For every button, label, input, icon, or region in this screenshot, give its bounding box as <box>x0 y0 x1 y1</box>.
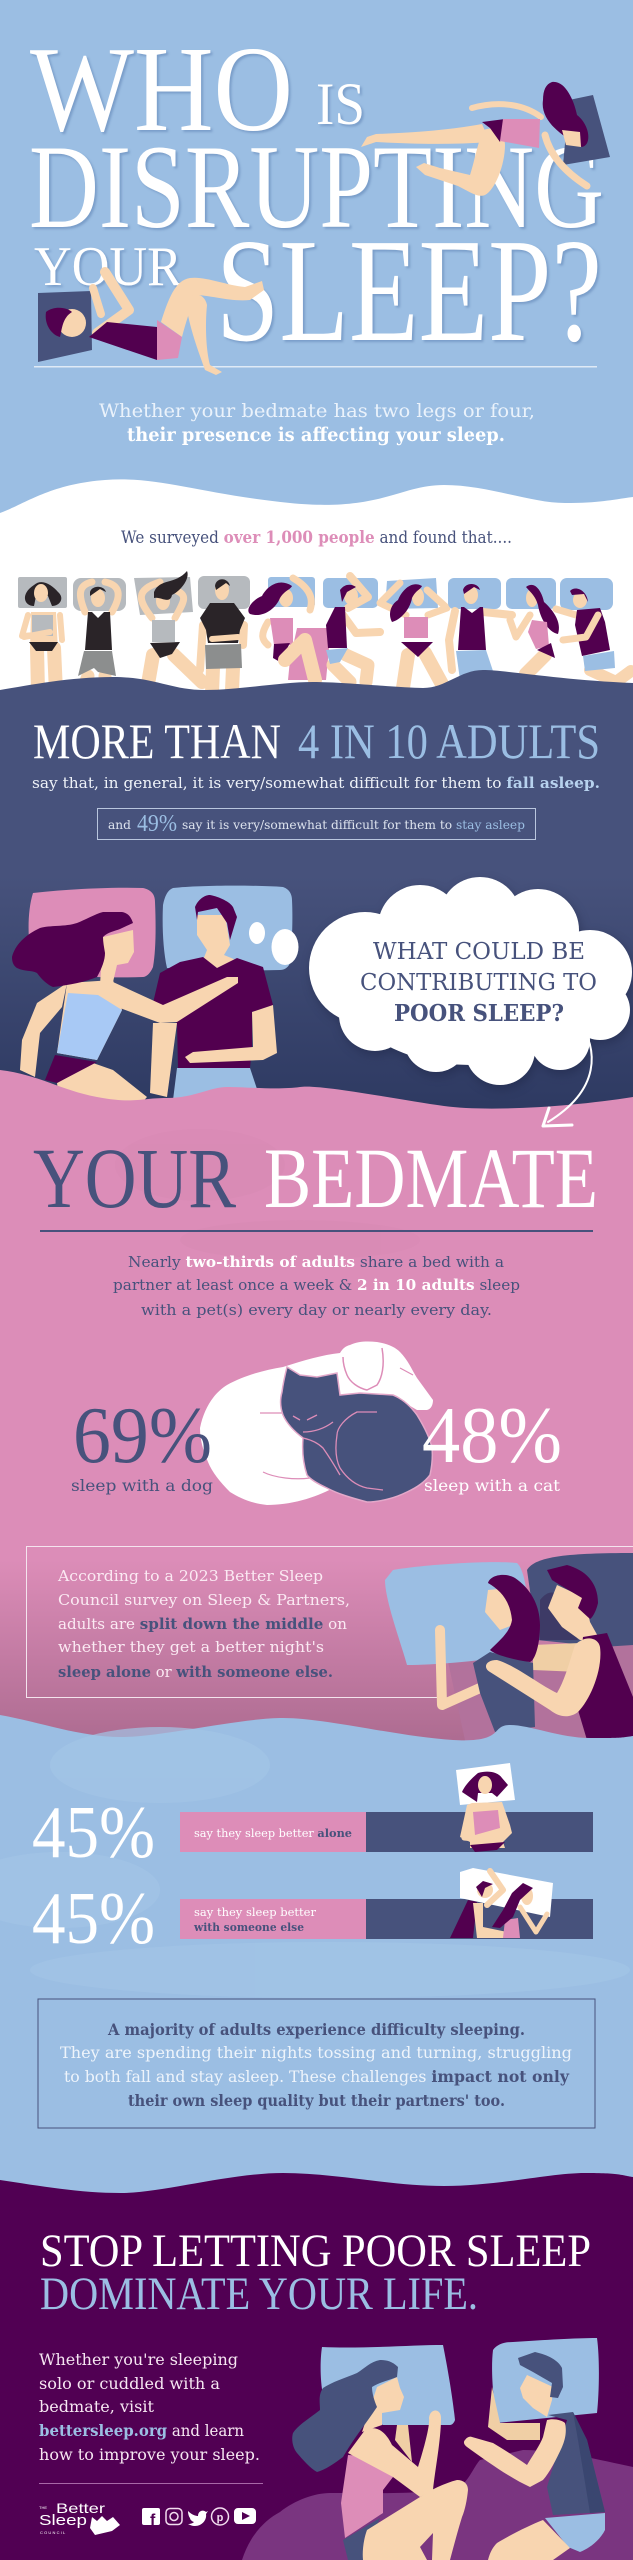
stat: dog: 69% <box>73 1392 212 1480</box>
cloud question: POOR SLEEP? <box>394 1000 564 1027</box>
cloud question <box>360 939 597 1027</box>
icon: youtube <box>234 2508 256 2524</box>
logo: The Better Sleep Council: COUNCIL <box>40 2530 66 2535</box>
icon: instagram <box>166 2508 182 2524</box>
cloud question: CONTRIBUTING TO <box>360 970 597 996</box>
white wave section <box>0 479 633 720</box>
call to action heading: DOMINATE YOUR LIFE. <box>40 2268 478 2320</box>
purple section background <box>0 2173 633 2560</box>
logo: The Better Sleep Council: Better <box>56 2500 105 2516</box>
social icons <box>142 2508 256 2529</box>
stat: 45 percent with someone: say they sleep better <box>194 1905 316 1919</box>
blue section background <box>0 1715 633 2200</box>
call to action paragraph: Whether you're sleeping <box>39 2350 238 2369</box>
thought cloud <box>309 877 632 1085</box>
title: YOUR <box>34 236 183 298</box>
conclusion box <box>38 1999 595 2128</box>
pink section background <box>0 1070 633 1750</box>
survey paragraph: Council survey on Sleep & Partners, <box>58 1591 350 1609</box>
call to action paragraph: how to improve your sleep. <box>39 2445 260 2464</box>
call to action heading: STOP LETTING POOR SLEEP <box>40 2225 591 2277</box>
call to action paragraph: solo or cuddled with a <box>39 2374 220 2393</box>
stat: cat: 48% <box>422 1392 562 1480</box>
title <box>29 22 604 373</box>
logo: The Better Sleep Council: Sleep <box>39 2512 87 2529</box>
illustration: couple facing each other <box>242 2338 633 2560</box>
title: IS <box>316 71 365 137</box>
texture blotches <box>115 1129 420 1260</box>
figure: woman on side top right <box>361 82 610 196</box>
callout: 49 percent: and <box>108 818 131 832</box>
navy section background <box>0 670 633 1125</box>
texture blotches <box>0 1727 630 1998</box>
survey paragraph <box>57 1567 350 1681</box>
figure: couple sleeping together <box>450 1868 553 1938</box>
stat: 45 percent alone: say they sleep better alone <box>194 1826 352 1840</box>
conclusion box: They are spending their nights tossing and turning, struggling <box>60 2043 572 2062</box>
stat: 45 percent with someone: 45% <box>32 1878 155 1960</box>
call to action paragraph: bedmate, visit <box>39 2397 155 2416</box>
figure 9 <box>506 578 559 674</box>
conclusion box: to both fall and stay asleep. These challenges impact not only <box>64 2067 570 2086</box>
stat: 45 percent with someone <box>32 1878 593 1960</box>
statistic sentence: say that, in general, it is very/somewhat difficult for them to fall asleep. <box>32 774 600 792</box>
figure: woman on back bottom left <box>38 272 264 375</box>
callout: 49 percent: 49% <box>137 811 177 837</box>
survey paragraph: adults are split down the middle on <box>58 1615 347 1633</box>
row of ten sleeping figures <box>18 571 631 692</box>
title rule <box>34 366 597 368</box>
section heading: your bedmate: YOUR <box>33 1130 237 1226</box>
figure 3 <box>134 571 202 684</box>
subtitle: Whether your bedmate has two legs or four, <box>99 400 535 422</box>
survey box outline <box>26 1546 633 1698</box>
figure 5 <box>248 577 331 680</box>
illustration: dog and cat <box>200 1341 433 1505</box>
divider <box>39 2483 263 2484</box>
figure 8 <box>448 578 512 680</box>
arrow <box>543 1018 592 1126</box>
heading rule <box>40 1230 593 1232</box>
call to action paragraph: bettersleep.org and learn <box>39 2421 244 2440</box>
figure 7 <box>380 578 447 688</box>
figure: woman sleeping alone <box>456 1763 515 1852</box>
illustration: couple in bed <box>12 886 298 1105</box>
statistic heading <box>33 713 600 769</box>
survey line: We surveyed over 1,000 people and found that.... <box>121 528 512 548</box>
figure 2 <box>73 578 126 692</box>
stat: 45 percent alone: 45% <box>32 1792 155 1874</box>
icon: twitter <box>188 2511 208 2526</box>
statistic heading: MORE THAN <box>33 713 281 769</box>
icon: facebook: f <box>150 2512 156 2529</box>
subtitle: their presence is affecting your sleep. <box>127 424 505 446</box>
figure 4 <box>198 576 250 692</box>
figure 10 <box>556 578 631 682</box>
survey paragraph: According to a 2023 Better Sleep <box>57 1567 323 1585</box>
stat: dog: sleep with a dog <box>71 1476 213 1495</box>
stat: 45 percent alone <box>32 1792 593 1874</box>
section heading: your bedmate <box>33 1130 598 1226</box>
logo: The Better Sleep Council: THE <box>39 2505 47 2510</box>
stat: cat: sleep with a cat <box>424 1476 561 1495</box>
call to action heading <box>40 2225 591 2320</box>
call to action paragraph <box>39 2350 260 2464</box>
callout: 49 percent: say it is very/somewhat difficult for them to stay asleep <box>182 818 525 832</box>
hero background <box>0 0 633 540</box>
subtitle <box>99 400 535 446</box>
logo: The Better Sleep Council <box>39 2500 120 2535</box>
figure 6 <box>323 576 380 682</box>
illustration: couple spooning <box>385 1553 633 1745</box>
bedmate paragraph <box>113 1253 520 1319</box>
callout: 49 percent <box>98 808 536 840</box>
bedmate paragraph: with a pet(s) every day or nearly every day. <box>141 1301 492 1319</box>
stat: 45 percent with someone: with someone else <box>193 1920 304 1934</box>
bedmate paragraph: Nearly two-thirds of adults share a bed with a <box>128 1253 504 1271</box>
conclusion box: A majority of adults experience difficulty sleeping. <box>107 2020 525 2039</box>
bedmate paragraph: partner at least once a week & 2 in 10 adults sleep <box>113 1276 520 1294</box>
figure 1 <box>18 577 67 692</box>
survey paragraph: sleep alone or with someone else. <box>58 1663 333 1681</box>
title: WHO <box>30 22 293 157</box>
survey paragraph: whether they get a better night's <box>58 1638 324 1656</box>
cloud question: WHAT COULD BE <box>373 939 585 965</box>
conclusion box: their own sleep quality but their partners' too. <box>128 2091 505 2110</box>
icon: pinterest: p <box>217 2512 224 2524</box>
